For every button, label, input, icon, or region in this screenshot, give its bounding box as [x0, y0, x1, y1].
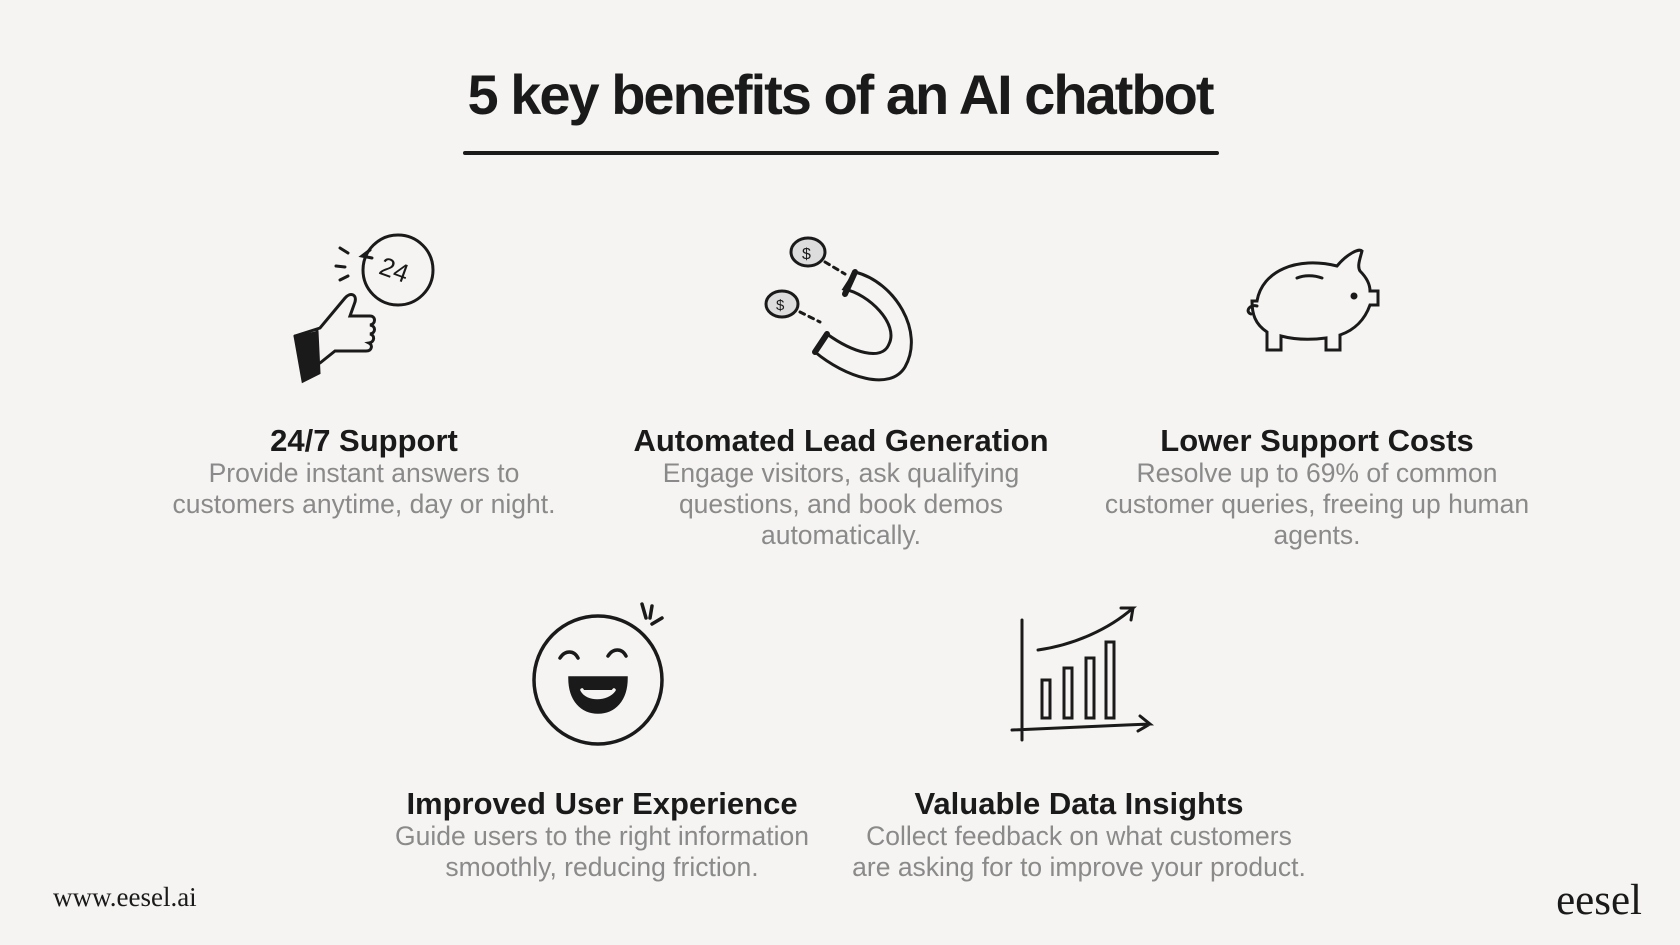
block: Automated Lead Generation: questions, and book demos: [679, 489, 1003, 519]
block: Automated Lead Generation: [633, 423, 1049, 550]
block: Improved User Experience: Improved User Experience: [406, 786, 798, 821]
block: Lower Support Costs: agents.: [1274, 520, 1360, 550]
footer: logo: eesel: [1556, 877, 1642, 924]
block: Valuable Data Insights: Valuable Data Insights: [914, 786, 1244, 821]
icon: 24/7 thumbs up: 24: [376, 251, 413, 289]
block: 24/7 Support: Provide instant answers to: [209, 458, 519, 488]
icon: growth chart: [1010, 606, 1154, 742]
block: Automated Lead Generation: automatically.: [761, 520, 921, 550]
icon: magnet: [764, 236, 913, 382]
block: Automated Lead Generation: Automated Lead Generation: [633, 423, 1049, 458]
block: 24/7 Support: [173, 423, 555, 519]
block: Lower Support Costs: customer queries, freeing up human: [1105, 489, 1529, 519]
title underline: [463, 151, 1219, 155]
block: Lower Support Costs: [1105, 423, 1529, 550]
icon: magnet: $: [776, 297, 785, 314]
block: 24/7 Support: customers anytime, day or night.: [173, 489, 555, 519]
icon: magnet: $: [802, 246, 811, 263]
title: 5 key benefits of an AI chatbot: [468, 63, 1212, 126]
block: Improved User Experience: [395, 786, 809, 882]
footer: url: www.eesel.ai: [53, 882, 197, 912]
block: Valuable Data Insights: are asking for to improve your product.: [852, 852, 1306, 882]
block: 24/7 Support: 24/7 Support: [270, 423, 458, 458]
icon: piggy bank: [1246, 248, 1380, 352]
block: Lower Support Costs: Resolve up to 69% of common: [1137, 458, 1497, 488]
block: Improved User Experience: Guide users to the right information: [395, 821, 809, 851]
block: Valuable Data Insights: Collect feedback on what customers: [866, 821, 1292, 851]
icon: 24/7 thumbs up: [294, 234, 434, 384]
block: Valuable Data Insights: [852, 786, 1306, 882]
block: Improved User Experience: smoothly, reducing friction.: [445, 852, 759, 882]
block: Automated Lead Generation: Engage visitors, ask qualifying: [663, 458, 1019, 488]
block: Lower Support Costs: Lower Support Costs: [1160, 423, 1474, 458]
icon: smiley: [532, 602, 664, 746]
